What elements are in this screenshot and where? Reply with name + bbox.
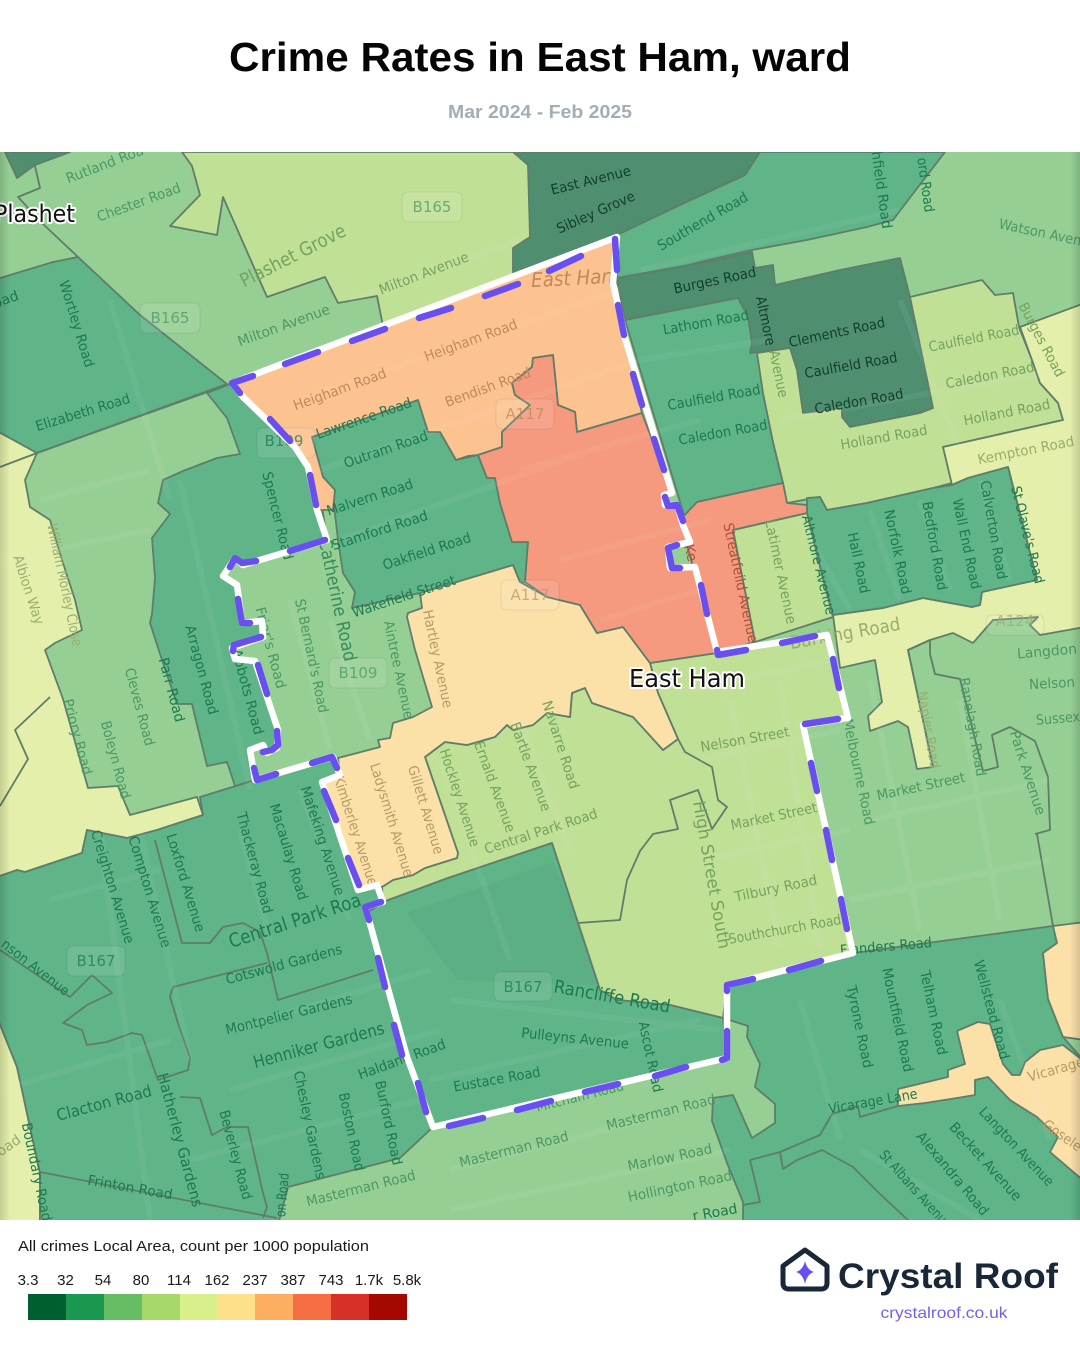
road name labels: Central Park Road [482,806,600,858]
road name labels: Stamford Road [330,508,430,554]
road name labels: Altmore Avenue [798,514,838,616]
road name labels: Nelson Street [699,724,791,756]
legend scale labels: 743 [318,1272,344,1289]
road name labels: Boundary Road [18,1121,54,1223]
road name labels: Oakfield Road [381,530,473,574]
road name labels: Loxford Avenue [162,832,208,934]
legend scale labels [18,1272,422,1289]
road name labels: Bartle Avenue [506,720,554,814]
road number shields: B109 [265,432,303,450]
road name labels: Priory Road [59,697,95,777]
road name labels: Caledon Road [944,360,1036,392]
park patch [577,917,600,985]
road name labels: Mountfield Road [878,966,916,1074]
road name labels: Ascot Road [635,1020,665,1094]
road name labels: Cotswold Gardens [224,942,344,988]
road name labels: Caledon Road [813,386,905,418]
road name labels: Southend Road [655,190,751,254]
road name labels: St Bernard's Road [291,598,331,714]
road name labels: Avenue [765,349,791,399]
legend scale labels: 1.7k [355,1272,384,1289]
region boundary lines [0,166,1053,1222]
road name labels: Albion Way [9,553,47,627]
road name labels: Tyrone Road [842,983,876,1070]
road name labels: Telham Road [916,968,950,1057]
road name labels: Kempton Road [976,434,1076,468]
road name labels: Langton Avenue [975,1104,1057,1190]
road number shields: A117 [506,405,544,423]
road name labels: Spencer Road [258,470,296,562]
road name labels: Ranelagh Road [955,676,989,778]
road name labels: Rutland Roa [64,143,146,187]
road name labels: Southchurch Road [727,912,843,948]
road name labels: Vicarage Lane [827,1086,919,1118]
title: Crime Rates in East Ham, ward [229,34,851,80]
road name labels: Plashet Grove [236,220,350,292]
crime rate regions [0,152,1080,1225]
legend scale labels: 54 [95,1272,111,1289]
legend colour ramp [28,1294,407,1320]
road name labels: Altmore [752,295,778,347]
road name labels: Holland Road [962,397,1052,429]
ward boundary: white line with purple dashes [223,237,853,1127]
road name labels: Burges Road [672,264,758,298]
road name labels: Parr Road [155,656,187,724]
road name labels: Aintree Avenue [380,619,416,721]
road name labels: Mafeking Avenue [297,784,347,898]
road name labels: Friar's Road [251,605,289,691]
road name labels: Elizabeth Road [34,391,132,435]
road name labels: Hollington Road [626,1168,734,1206]
road name labels: Milton Avenue [236,302,332,350]
road name labels: Ladysmith Avenue [366,761,416,879]
road name labels: Caledon Road [677,417,769,449]
road name labels: Latimer Avenue [761,518,799,626]
road name labels: Heigham Road [422,317,520,365]
road name labels: Clements Road [787,315,887,351]
road name labels: Montpelier Gardens [224,992,354,1038]
road name labels: Calverton Road [976,479,1010,581]
road name labels: Ke [680,543,700,563]
road name labels: Melbourne Road [839,718,877,826]
legend scale labels: 237 [242,1272,268,1289]
road name labels: Hartley Avenue [419,608,455,710]
road name labels: Langdon [1016,641,1078,663]
road name labels: Masterman Road [605,1092,717,1134]
road name labels: Barking Road [788,614,902,654]
road name labels: Burford Road [371,1079,405,1167]
legend scale labels: 5.8k [393,1272,422,1289]
road name labels: r Road [691,1201,739,1225]
road name labels: Tilbury Road [732,872,819,906]
road name labels: Boston Road [335,1091,367,1173]
legend scale labels: 3.3 [18,1272,38,1289]
logo wordmark: Crystal Roof [838,1257,1058,1296]
road name labels: Streatfeild Avenue [719,522,761,644]
road name labels: Abbots Road [228,647,266,737]
road name labels: Frinton Road [86,1173,174,1203]
road name labels: Cleves Road [121,666,157,748]
road name labels: Bendish Road [443,365,533,411]
road name labels: Eustace Road [452,1064,542,1096]
road name labels: Catherine Road [314,537,360,663]
logo icon: house with sparkle [783,1250,827,1289]
road name labels: Sibley Grove [554,189,638,237]
road name labels: Lawrence Road [314,395,414,443]
road name labels: Market Street [875,770,967,804]
road name labels: William Morley Close [43,522,85,648]
road name labels: Central Park Roa [226,889,364,953]
road name labels: Beverley Road [215,1108,255,1202]
road name labels: East Avenue [549,163,633,199]
legend scale labels: 387 [280,1272,306,1289]
legend scale labels: 32 [57,1272,74,1289]
road name labels: Marlow Road [626,1141,714,1175]
road name labels: Boleyn Road [97,719,133,801]
road name labels: Hockley Avenue [436,747,482,849]
road name labels: Becket Avenue [946,1119,1024,1205]
road name labels: Bedford Road [918,500,950,592]
road name labels: Outram Road [342,428,430,472]
road number shields: A124 [996,612,1034,630]
road name labels: Hatherley Gardens [153,1071,207,1209]
road name labels: Macaulay Road [266,802,310,902]
road name labels: East Han [530,264,614,292]
road number shields [67,192,1044,1001]
road name labels: Caulfield Road [803,350,899,382]
road name labels: Burges Road [1015,300,1067,380]
road number shields: B167 [504,978,542,996]
road name labels: Rancliffe Road [552,976,672,1018]
road name labels: Wakefield Street [350,573,458,621]
road name labels: Compton Avenue [124,834,174,950]
road name labels: nson Avenue [0,936,72,1000]
subtitle: date range: Mar 2024 - Feb 2025 [448,101,632,122]
logo url: crystalroof.co.uk [880,1305,1009,1322]
road name labels: Nelson [1029,675,1075,693]
legend scale labels: 162 [204,1272,230,1289]
road name labels: Ernald Avenue [470,739,518,835]
road name labels: Haldane Road [356,1037,448,1083]
road name labels: Heigham Road [291,366,389,414]
minor street lines [0,210,1060,1220]
road name labels: Clacton Road [54,1081,154,1125]
road name labels: Pulleyns Avenue [520,1025,630,1053]
road name labels: Norfolk Road [880,508,914,596]
road number shields: B109 [339,664,377,682]
road name labels: Wellstead Road [970,959,1012,1061]
place label: East Ham: East Ham [629,664,745,693]
legend scale labels: 114 [167,1272,191,1289]
road name labels: Navarre Road [538,699,582,791]
road name labels: St Albans Avenue [876,1147,954,1233]
road name labels: Lathom Road [662,308,750,338]
road name labels: Mitcham Road [534,1078,626,1116]
road name labels: Park Avenue [1006,729,1048,817]
road name labels: High Street South [688,799,734,951]
road name labels: Caulfield Road [666,382,762,414]
legend scale labels: 80 [133,1272,149,1289]
road number shields: B167 [77,952,115,970]
road name labels: Thackeray Road [233,810,275,915]
road name labels: St Olave's Road [1007,485,1047,585]
map edge shading [0,152,1080,1220]
road name labels: Chesley Gardens [290,1070,328,1180]
road name labels: Napier Road [913,690,943,770]
road name labels: Wall End Road [949,497,983,591]
road name labels: Masterman Road [305,1168,417,1210]
road name labels: ord Road [913,157,937,213]
road name labels: Henniker Gardens [251,1019,387,1073]
road name labels: Market Street [729,800,819,834]
road name labels: Alexandra Road [912,1129,992,1219]
road name labels: on Road [273,1172,293,1218]
road number shields: A117 [511,586,549,604]
road name labels: Hall Road [844,531,872,595]
road name labels: Malvern Road [325,476,415,520]
legend title: All crimes Local Area, count per 1000 population [18,1238,369,1255]
road name labels: Arragon Road [181,623,221,717]
road name labels: Holland Road [839,422,929,454]
road number shields: B165 [151,309,189,327]
road name labels: Wortley Road [55,279,97,369]
road name labels: Masterman Road [458,1129,570,1171]
road name labels: hfield Road [868,150,894,230]
road name labels: Kimberley Avenue [330,774,380,888]
road number shields: B165 [413,198,451,216]
road name labels: Flanders Road [839,935,933,959]
road name labels: Creighton Avenue [87,828,137,946]
road name labels: Caulfield Road [927,322,1021,356]
road name labels: Chester Road [95,180,183,226]
road name labels: Gillett Avenue [404,764,446,856]
road name labels: Milton Avenue [377,250,471,298]
